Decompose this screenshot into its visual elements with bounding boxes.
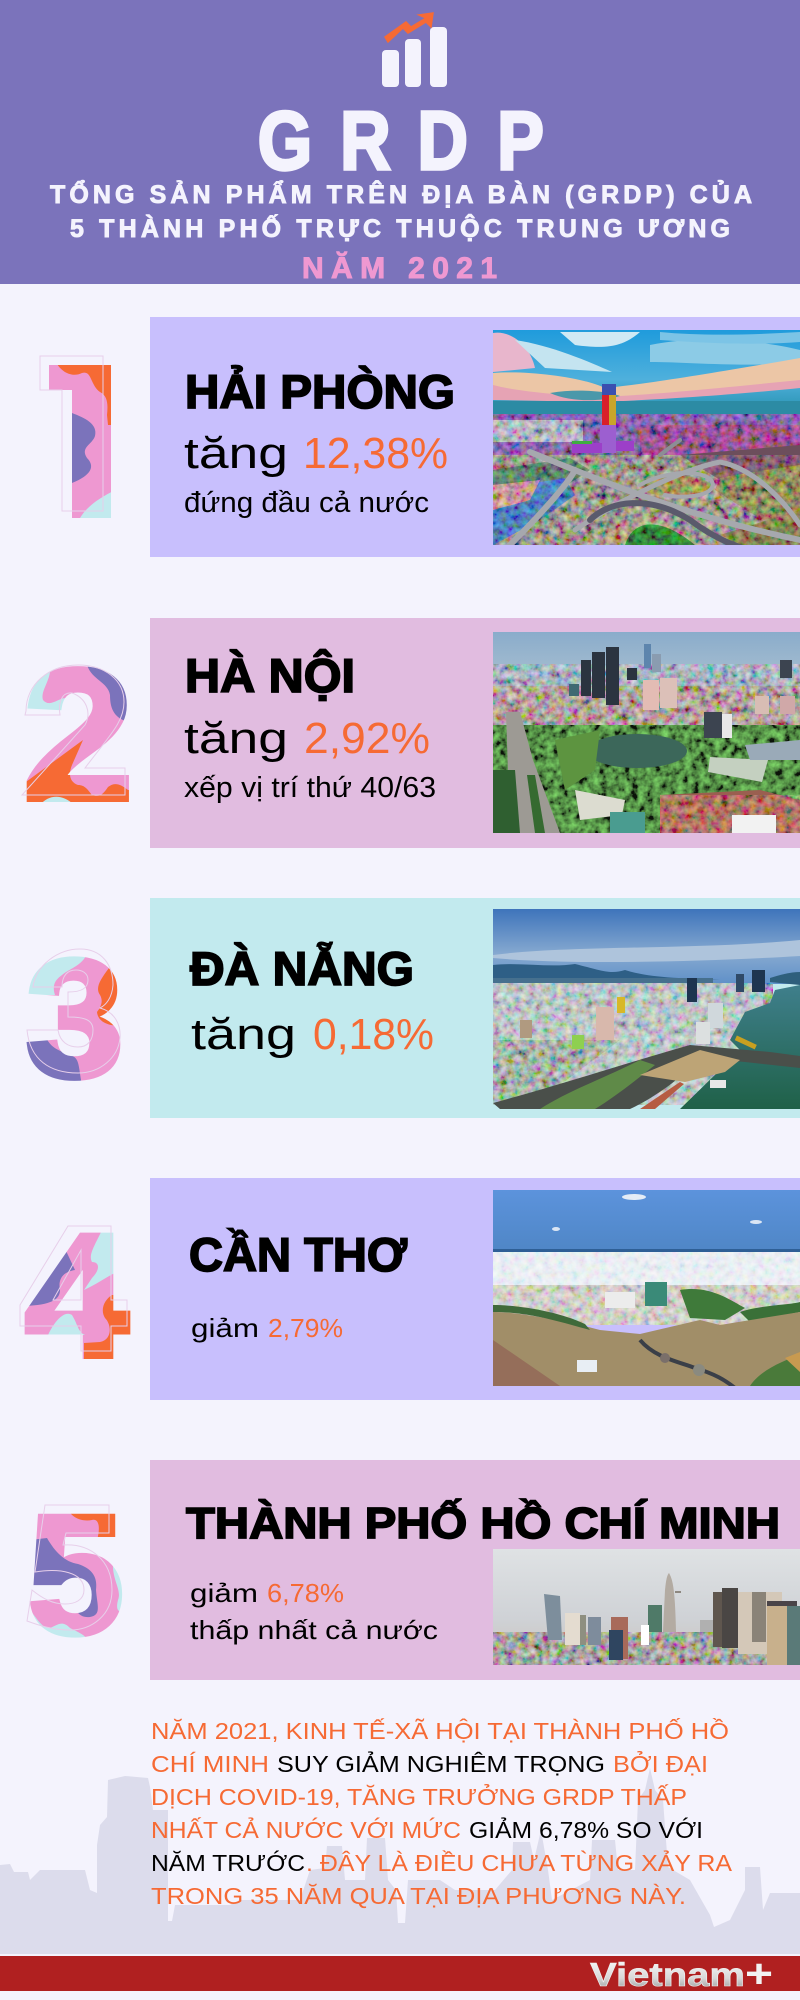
year label: NĂM 2021 xyxy=(302,251,497,285)
panel: Hải Phòng xyxy=(150,317,800,557)
decline figure xyxy=(191,1313,343,1343)
growth figure: tăng xyxy=(184,429,288,478)
photo: Hồ Chí Minh skyline xyxy=(493,1549,800,1665)
panel: Thành phố Hồ Chí Minh xyxy=(150,1460,800,1680)
growth figure xyxy=(184,429,448,478)
subtitle: TỔNG SẢN PHẨM TRÊN ĐỊA BÀN (GRDP) CỦA xyxy=(50,179,752,209)
panel: Hà Nội xyxy=(150,618,800,848)
growth figure xyxy=(184,714,430,763)
decline figure xyxy=(190,1578,344,1608)
logo: Vietnam+: + xyxy=(745,1952,773,1996)
decline figure: 6,78% xyxy=(267,1578,344,1608)
body paragraph: BỞI ĐẠI xyxy=(613,1749,708,1777)
body paragraph: NĂM 2021, KINH TẾ-XÃ HỘI TẠI THÀNH PHỐ HỒ xyxy=(151,1717,729,1744)
growth figure: 12,38% xyxy=(303,429,448,478)
panel: Đà Nẵng xyxy=(150,898,800,1118)
decline figure: giảm xyxy=(191,1313,259,1343)
body paragraph: DỊCH COVID-19, TĂNG TRƯỞNG GRDP THẤP xyxy=(151,1782,687,1810)
rank number 5 xyxy=(26,1504,122,1638)
city name: THÀNH PHỐ HỒ CHÍ MINH xyxy=(186,1497,780,1548)
panel: Cần Thơ xyxy=(150,1178,800,1400)
body paragraph xyxy=(151,1717,733,1909)
photo: Cần Thơ riverside xyxy=(493,1190,800,1388)
logo: Vietnam+: Vietnam xyxy=(590,1956,745,1993)
growth figure: 2,92% xyxy=(304,714,430,763)
footer band xyxy=(0,1952,800,1996)
rank number 3 xyxy=(26,948,120,1081)
growth figure: tăng xyxy=(184,714,288,763)
header band xyxy=(0,0,800,285)
subtitle xyxy=(50,179,752,243)
body paragraph: TRONG 35 NĂM QUA TẠI ĐỊA PHƯƠNG NÀY. xyxy=(151,1883,686,1909)
rank number 1 xyxy=(40,356,111,518)
skyline silhouette xyxy=(0,1768,800,1954)
body paragraph: . ĐÂY LÀ ĐIỀU CHƯA TỪNG XẢY RA xyxy=(306,1848,733,1876)
body paragraph: GIẢM 6,78% SO VỚI xyxy=(469,1815,703,1843)
rank number 2 xyxy=(21,664,129,802)
city name: HẢI PHÒNG xyxy=(185,365,455,418)
icon: rising bar chart with arrow xyxy=(382,13,447,87)
body paragraph: SUY GIẢM NGHIÊM TRỌNG xyxy=(277,1749,605,1777)
note: xếp vị trí thứ 40/63 xyxy=(184,772,436,804)
body paragraph: NĂM TRƯỚC xyxy=(151,1850,305,1876)
subtitle: 5 THÀNH PHỐ TRỰC THUỘC TRUNG ƯƠNG xyxy=(70,213,730,243)
growth figure: 0,18% xyxy=(313,1010,434,1059)
title: GRDP: GRDP xyxy=(258,95,544,187)
note: đứng đầu cả nước xyxy=(184,487,429,519)
city name: HÀ NỘI xyxy=(185,649,355,702)
logo: Vietnam+ xyxy=(590,1952,773,1996)
body paragraph: CHÍ MINH xyxy=(151,1751,269,1777)
growth figure xyxy=(191,1010,434,1059)
photo: Hải Phòng interchange and tower xyxy=(493,330,800,550)
growth figure: tăng xyxy=(191,1010,296,1059)
note: thấp nhất cả nước xyxy=(190,1615,438,1645)
city name: ĐÀ NẴNG xyxy=(190,942,414,995)
city name: CẦN THƠ xyxy=(189,1228,408,1281)
photo: Hà Nội skyline and lake xyxy=(493,632,800,833)
body paragraph: NHẤT CẢ NƯỚC VỚI MỨC xyxy=(151,1815,461,1843)
rank number 4 xyxy=(20,1226,130,1359)
photo: Đà Nẵng river and city xyxy=(493,909,800,1109)
decline figure: giảm xyxy=(190,1578,258,1608)
decline figure: 2,79% xyxy=(268,1313,343,1343)
